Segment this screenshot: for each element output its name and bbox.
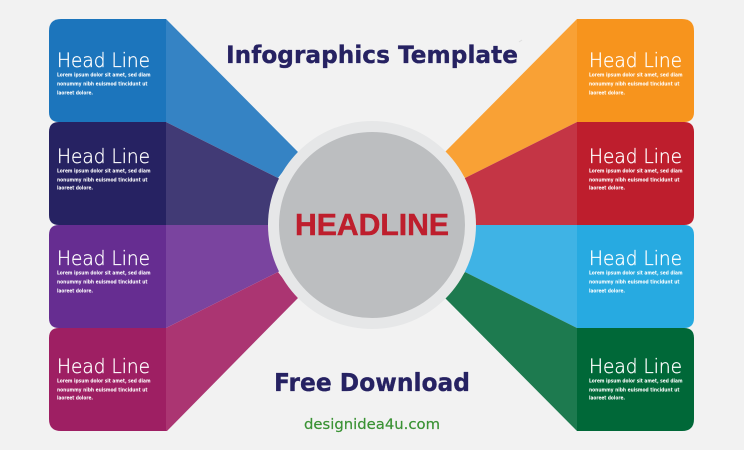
panel: red right: Head Line	[589, 145, 682, 168]
panel: orange top-right: nonummy nibh euismod tincidunt ut	[589, 82, 680, 88]
panel: red right: laoreet dolore.	[589, 186, 625, 192]
website credit: designidea4u.com	[304, 417, 440, 433]
panel: orange top-right: laoreet dolore.	[589, 90, 625, 96]
central circle with headline	[268, 121, 476, 329]
panel: light blue right: Head Line	[589, 247, 682, 270]
title: Infographics Template	[226, 41, 518, 69]
panel: purple left: Head Line	[57, 247, 150, 270]
panel: blue top-left: Head Line	[57, 49, 150, 72]
panel: navy left	[49, 122, 372, 225]
panel: magenta bottom-left: Lorem ipsum dolor sit amet, sed diam	[57, 378, 150, 384]
panel: green bottom-right: laoreet dolore.	[589, 396, 625, 402]
panel: blue top-left: Lorem ipsum dolor sit amet, sed diam	[57, 72, 150, 78]
panel: green bottom-right: Head Line	[589, 355, 682, 378]
panel: purple left: laoreet dolore.	[57, 288, 93, 294]
panel: orange top-right: Head Line	[589, 49, 682, 72]
panel: navy left: Lorem ipsum dolor sit amet, sed diam	[57, 168, 150, 174]
panel: light blue right	[372, 225, 694, 328]
panel: magenta bottom-left: Head Line	[57, 355, 150, 378]
panel: purple left: nonummy nibh euismod tincidunt ut	[57, 280, 148, 286]
panel: blue top-left: nonummy nibh euismod tincidunt ut	[57, 82, 148, 88]
panel: red right	[372, 122, 694, 225]
panel: orange top-right: Lorem ipsum dolor sit amet, sed diam	[589, 72, 682, 78]
central circle with headline: HEADLINE	[295, 207, 449, 242]
panel: green bottom-right	[445, 272, 694, 431]
panel: navy left: laoreet dolore.	[57, 186, 93, 192]
panel: orange top-right	[445, 19, 694, 178]
panel: light blue right: nonummy nibh euismod tincidunt ut	[589, 280, 680, 286]
panel: navy left: nonummy nibh euismod tincidunt ut	[57, 178, 148, 184]
panel: light blue right: Lorem ipsum dolor sit amet, sed diam	[589, 270, 682, 276]
panel: purple left: Lorem ipsum dolor sit amet, sed diam	[57, 270, 150, 276]
panel: red right: Lorem ipsum dolor sit amet, sed diam	[589, 168, 682, 174]
panel: magenta bottom-left	[49, 272, 298, 431]
panel: green bottom-right: nonummy nibh euismod tincidunt ut	[589, 388, 680, 394]
panel: magenta bottom-left: laoreet dolore.	[57, 396, 93, 402]
panel: magenta bottom-left: nonummy nibh euismod tincidunt ut	[57, 388, 148, 394]
panel: purple left	[49, 225, 372, 328]
panel: blue top-left	[49, 19, 298, 178]
subtitle: Free Download	[274, 368, 470, 397]
panel: blue top-left: laoreet dolore.	[57, 90, 93, 96]
panel: green bottom-right: Lorem ipsum dolor sit amet, sed diam	[589, 378, 682, 384]
panel: light blue right: laoreet dolore.	[589, 288, 625, 294]
panel: navy left: Head Line	[57, 145, 150, 168]
panel: red right: nonummy nibh euismod tincidunt ut	[589, 178, 680, 184]
